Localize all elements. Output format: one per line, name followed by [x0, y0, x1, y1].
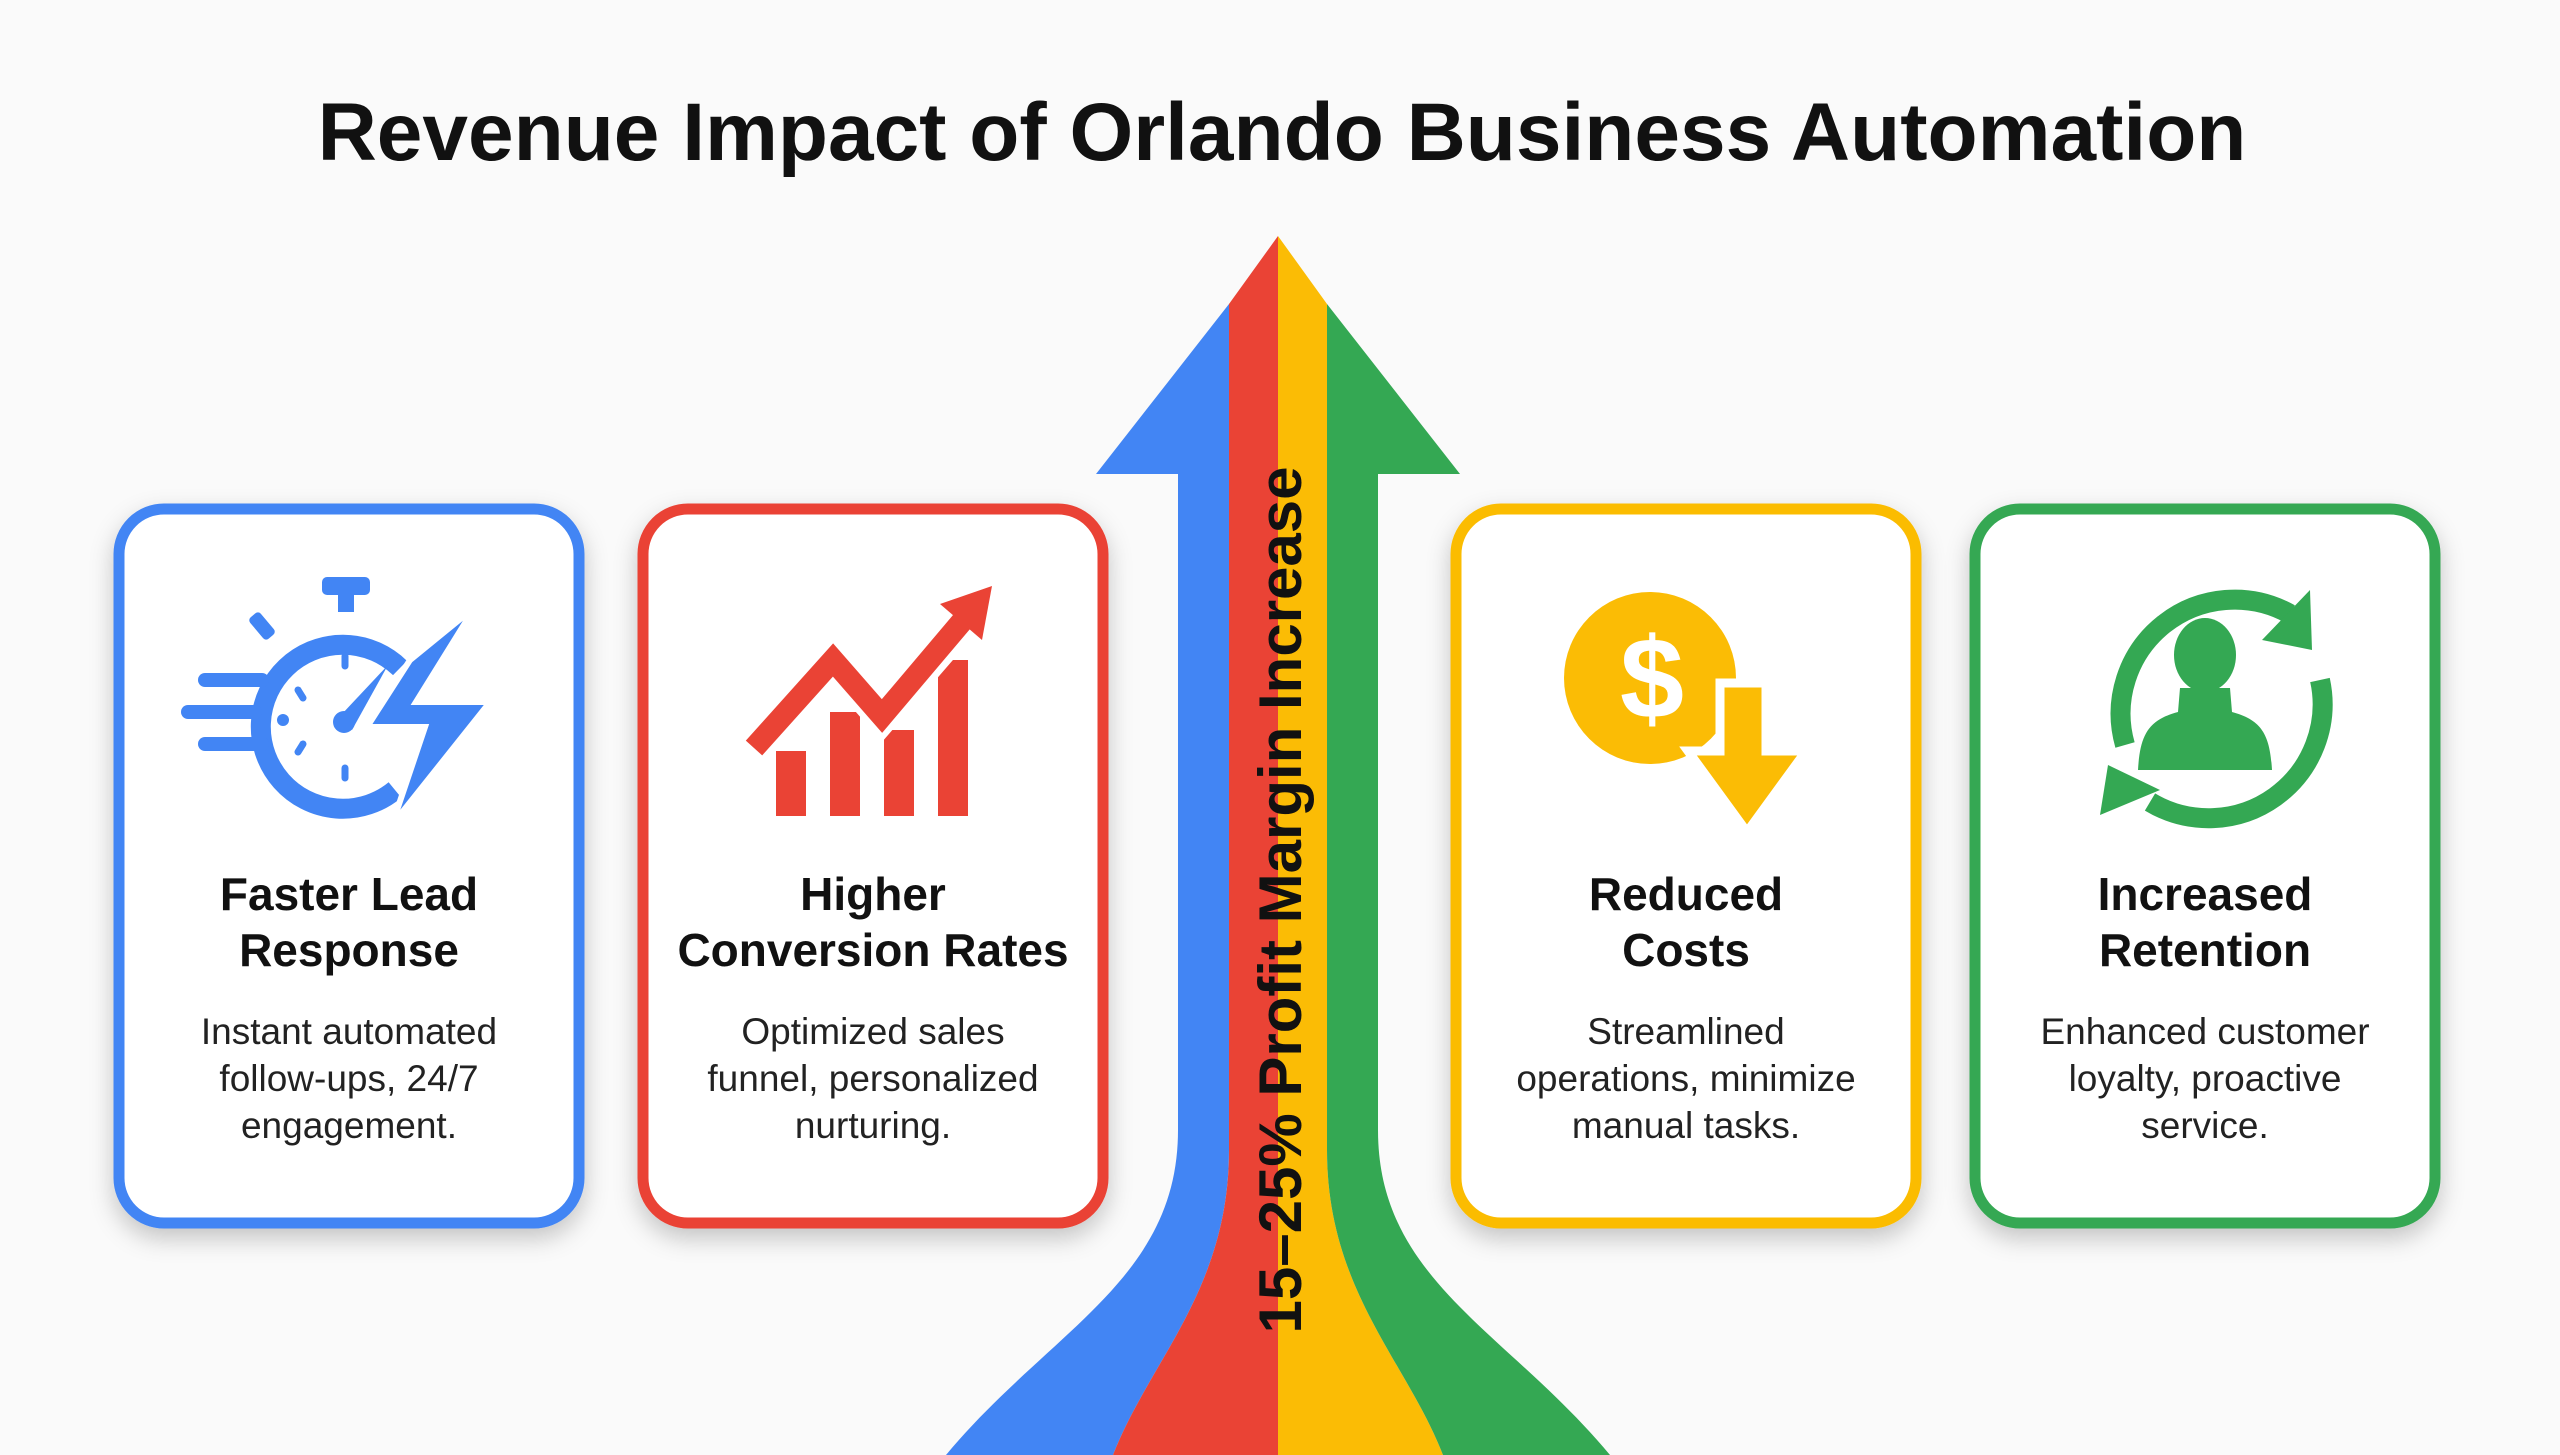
- panel: reduced costs: operations, minimize: [1516, 1058, 1856, 1099]
- arrow: central growth arrow: [946, 236, 1610, 1455]
- panel: faster lead response: engagement.: [241, 1105, 457, 1146]
- panel: higher conversion rates: nurturing.: [795, 1105, 951, 1146]
- panel: increased retention: service.: [2141, 1105, 2269, 1146]
- panel: increased retention: Retention: [2099, 924, 2311, 976]
- body text: Instant automated: [201, 1011, 497, 1052]
- panel: faster lead response: Response: [239, 924, 459, 976]
- heading: Reduced: [1589, 868, 1783, 920]
- panel: faster lead response: [119, 509, 579, 1223]
- body text: Optimized sales: [741, 1011, 1005, 1052]
- title: Revenue Impact of Orlando Business Automation: [318, 87, 2246, 178]
- panel: higher conversion rates: [643, 509, 1103, 1223]
- heading: Faster Lead: [220, 868, 478, 920]
- heading: Increased: [2098, 868, 2312, 920]
- body text: Streamlined: [1587, 1011, 1785, 1052]
- arrow label: 15–25% Profit Margin Increase: [1247, 466, 1314, 1334]
- body text: Enhanced customer: [2040, 1011, 2370, 1052]
- icon: stopwatch with lightning: [188, 577, 490, 825]
- panel: reduced costs: manual tasks.: [1572, 1105, 1800, 1146]
- panel: increased retention: loyalty, proactive: [2069, 1058, 2341, 1099]
- icon: dollar coin with down arrow: $: [1620, 615, 1684, 743]
- heading: Higher: [800, 868, 946, 920]
- panel: reduced costs: [1456, 509, 1916, 1223]
- panel: increased retention: [1975, 509, 2435, 1223]
- panel: higher conversion rates: funnel, personalized: [707, 1058, 1039, 1099]
- icon: bar chart with rising arrow: [754, 586, 992, 816]
- panel: faster lead response: follow-ups, 24/7: [219, 1058, 479, 1099]
- panel: reduced costs: Costs: [1622, 924, 1750, 976]
- icon: person with circular arrows: [2100, 590, 2323, 818]
- icon: dollar coin with down arrow: [1564, 592, 1806, 832]
- panel: higher conversion rates: Conversion Rates: [677, 924, 1069, 976]
